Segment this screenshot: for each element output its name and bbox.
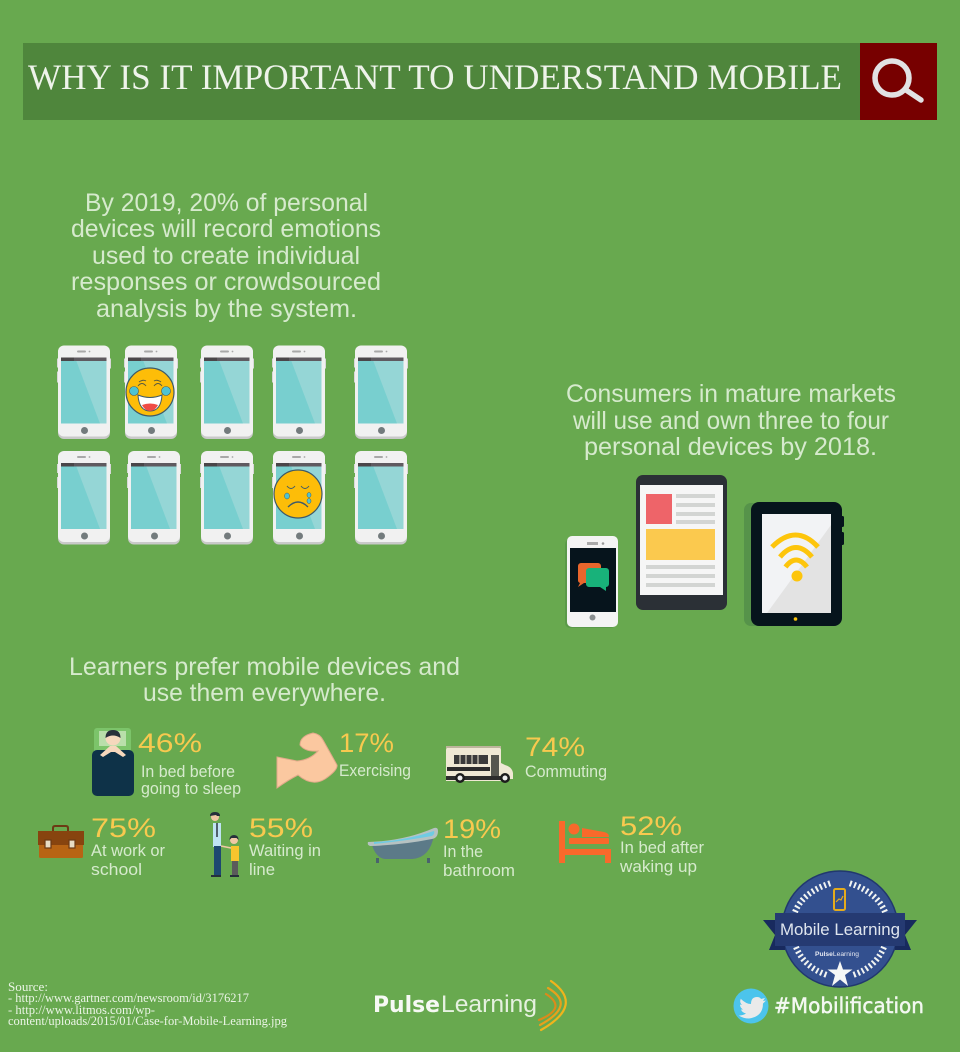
label [443,843,515,880]
stat: exercising [277,728,411,788]
phone grid with emotions [57,346,408,544]
icon: star [828,961,852,986]
source text: Source: [8,980,48,994]
icon: magnifier [860,43,937,120]
label: line [249,861,275,879]
label: In the [443,843,483,861]
twitter hashtag [734,988,924,1024]
stat: in bed before going to sleep [92,728,241,798]
source text: - http://www.gartner.com/newsroom/id/3176217 [8,991,249,1005]
label: school [91,861,142,879]
icon: man and child [210,812,239,877]
icon: bathtub [368,828,438,863]
stat: in bed after waking up [559,811,704,876]
value: 55% [249,813,313,843]
source text: content/uploads/2015/01/Case-for-Mobile-Learning.jpg [8,1014,288,1028]
icon: crying face [274,470,322,518]
stat: at work or school [38,813,165,879]
text block: emotions statistic [71,189,381,323]
title: WHY IS IT IMPORTANT TO UNDERSTAND MOBILE [28,57,842,97]
icon: person in bed [92,728,134,796]
badge logo text: PulseLearning [815,951,859,958]
value: 17% [339,728,394,758]
label [141,763,241,798]
value: 75% [91,813,156,843]
value: 46% [138,728,202,758]
stat: waiting in line [210,812,321,879]
icon: phone in badge [834,889,845,910]
value: 52% [620,811,682,841]
label: going to sleep [141,780,241,798]
stat: commuting [446,732,607,783]
logo: PulseLearning: Pulse [373,993,440,1018]
heading: learners: Learners prefer mobile devices and [69,653,460,681]
text block: emotions statistic: responses or crowdsourced [71,268,381,296]
source text [8,980,288,1028]
icon: orange bed [559,821,611,863]
icon: bus [446,746,513,783]
badge: mobile learning [763,871,917,987]
hashtag text: #Mobilification [774,994,924,1018]
value: 19% [443,814,501,844]
label: In bed after [620,839,704,857]
icon: briefcase [38,826,84,858]
source text: - http://www.litmos.com/wp- [8,1003,155,1017]
text block: consumers statistic: Consumers in mature markets [566,380,896,408]
label: In bed before [141,763,235,781]
icon: smartphone with chat bubbles [565,536,618,628]
icon: laughing face [126,368,174,416]
logo: PulseLearning: Learning [441,991,537,1018]
label: bathroom [443,862,515,880]
stat: in the bathroom [368,814,515,880]
ribbon: Mobile Learning [780,920,900,939]
heading: learners: use them everywhere. [143,679,386,707]
text block: emotions statistic: analysis by the system. [96,295,357,323]
label: Exercising [339,762,411,780]
text block: consumers statistic [566,380,896,461]
text block: emotions statistic: used to create individual [92,242,360,270]
icon: tablet with wifi symbol [744,502,844,626]
icon: tablet with article [636,475,727,610]
laurel wreath [795,883,885,975]
ribbon [763,913,917,950]
label [91,842,165,879]
text block: consumers statistic: will use and own three to four [572,407,889,435]
value: 74% [525,732,585,762]
icon: twitter bird [734,988,768,1024]
icon: flexed arm [277,733,337,788]
label: Commuting [525,763,607,781]
heading: learners [69,653,460,707]
label: waking up [619,858,697,876]
title banner [23,43,937,120]
devices illustration [565,475,844,628]
label [619,839,704,876]
label: At work or [91,842,165,860]
text block: emotions statistic: devices will record emotions [71,215,381,243]
logo: PulseLearning [373,981,566,1030]
label: Waiting in [249,842,321,860]
text block: emotions statistic: By 2019, 20% of personal [85,189,368,217]
text block: consumers statistic: personal devices by 2018. [584,433,877,461]
label [249,842,321,879]
